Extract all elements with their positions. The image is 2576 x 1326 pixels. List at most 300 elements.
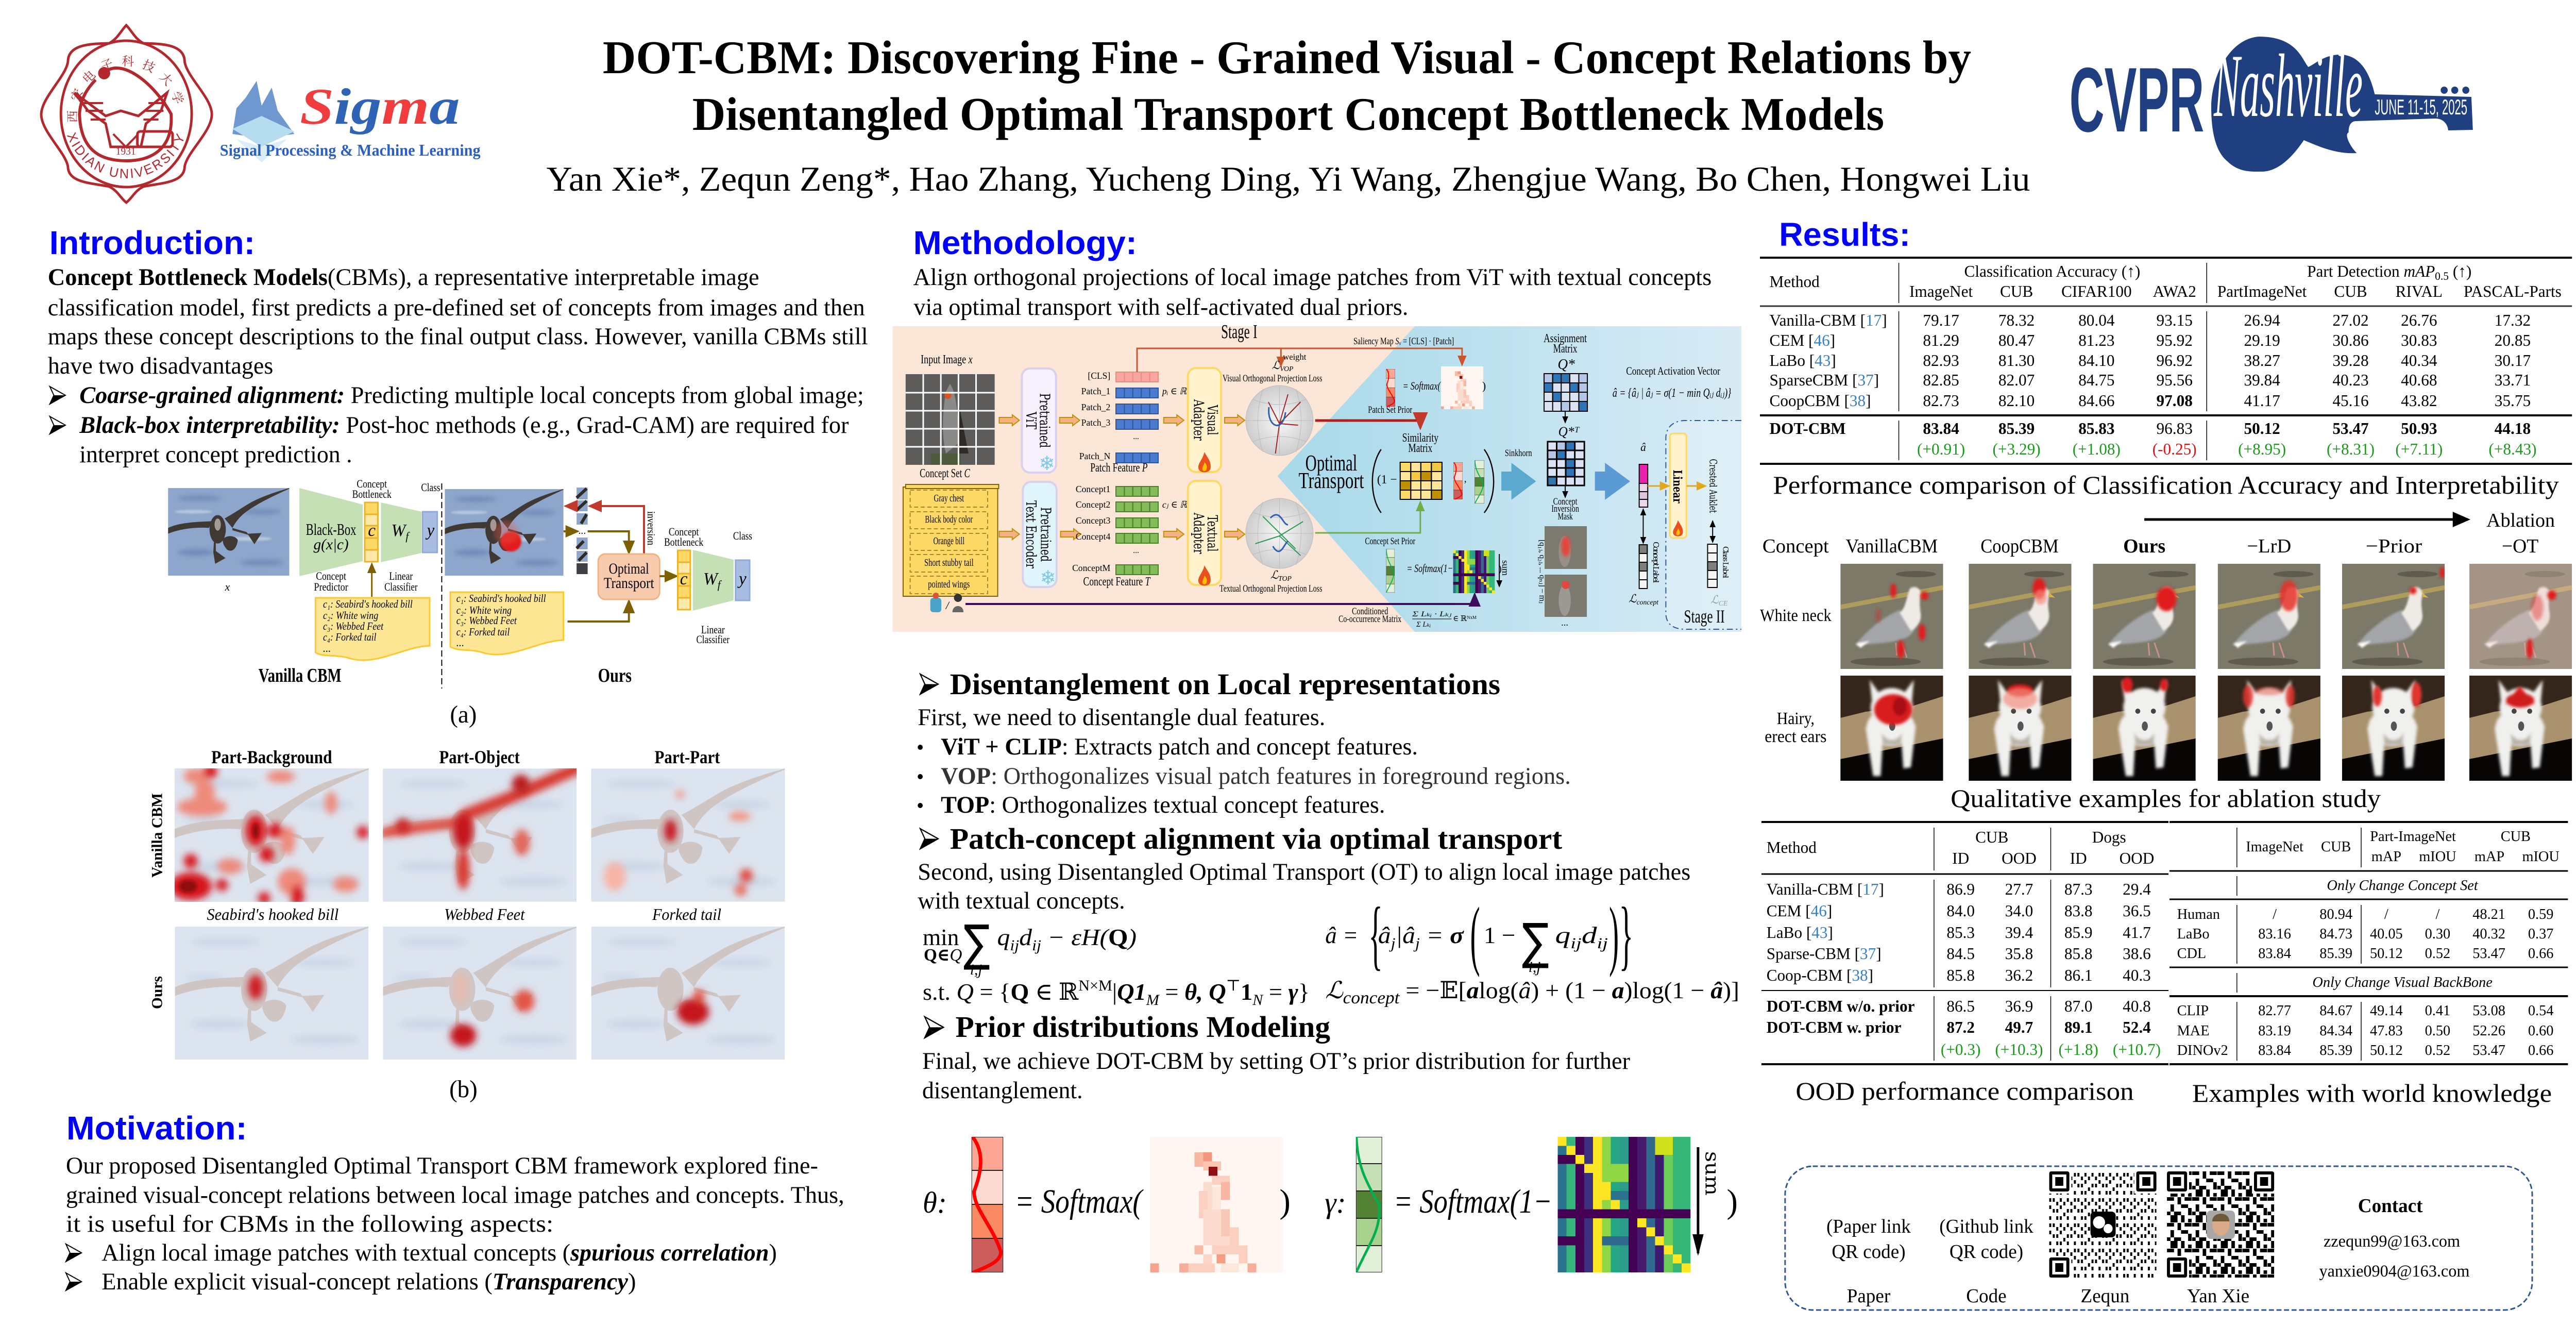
figure (a): vanilla CBM vs ours: c	[368, 521, 376, 540]
diagram small labels: ℒ	[1272, 359, 1280, 372]
heading: Methodology: Methodology:	[913, 225, 1137, 261]
table: classification accuracy and interpretability: 78.32	[1998, 311, 2035, 329]
table: world knowledge examples: 84.67	[2319, 1002, 2352, 1019]
table: classification accuracy and interpretability: 39.84	[2244, 371, 2280, 389]
text block: motivation: Enable explicit visual-concept relations (Transparency)	[101, 1269, 636, 1295]
figure (a): vanilla CBM vs ours: Concept	[316, 570, 346, 582]
table: classification accuracy and interpretability: (↑)	[2449, 262, 2471, 280]
text block: disentanglement	[918, 668, 1571, 818]
dog: CoopCBM	[1969, 676, 2072, 781]
table: world knowledge examples: CDL	[2177, 945, 2206, 962]
diagram small labels: ℒ	[1270, 569, 1278, 581]
concept labels: Seabird's hooked bill	[207, 905, 338, 924]
table: classification accuracy and interpretability: 0.5	[2435, 270, 2449, 282]
equation: activation: j	[1413, 935, 1420, 952]
equation: activation: ∑	[1522, 913, 1549, 970]
table: OOD performance: 52.4	[2123, 1018, 2151, 1036]
table: world knowledge examples: ImageNet	[2246, 838, 2303, 855]
table: classification accuracy and interpretability: 79.17	[1923, 311, 1959, 329]
table: world knowledge examples: 0.66	[2528, 945, 2553, 962]
gull: Prior	[2342, 564, 2445, 669]
contact	[2319, 1196, 2469, 1281]
table: world knowledge examples: mIOU	[2522, 848, 2560, 865]
table: OOD performance: 86.1	[2064, 966, 2093, 984]
figure (a): vanilla CBM vs ours: Concept	[357, 478, 387, 490]
figure (a): vanilla CBM vs ours: Black-Box	[306, 521, 357, 539]
table: classification accuracy and interpretability: 26.76	[2401, 311, 2437, 329]
table: OOD performance: 83.8	[2064, 902, 2093, 920]
concept features	[1072, 484, 1191, 589]
patch features: pᵢ ∈ ℝᵈ	[1161, 386, 1190, 396]
patch features: Patch_N	[1079, 451, 1110, 461]
diagram background	[892, 326, 1741, 632]
table: classification accuracy and interpretability: 30.17	[2495, 351, 2531, 370]
caption labels: Ours	[598, 665, 632, 686]
diagram small labels	[1219, 332, 1732, 629]
patch set prior: = Softmax(	[1403, 380, 1441, 392]
diagram small labels: [q₁ⱼ, q₂ⱼ, ... qₙⱼ] − mⱼ	[1537, 540, 1546, 603]
image patches	[577, 488, 588, 574]
table: world knowledge examples: 0.52	[2425, 945, 2450, 962]
diagram small labels: weight	[1283, 352, 1307, 362]
paper link placeholder: Paper	[1847, 1286, 1891, 1307]
github link placeholder: QR code)	[1950, 1241, 2023, 1263]
equation: optimal transport objective	[923, 915, 1137, 978]
visual adapter	[1188, 368, 1221, 472]
text block: patch-concept alignment	[918, 823, 1690, 914]
gull: OT	[2469, 564, 2572, 669]
table: classification accuracy and interpretability: (+8.95)	[2238, 440, 2286, 458]
concept set prior	[1386, 549, 1511, 593]
equation: activation: =	[1420, 922, 1450, 948]
equation: constraint: M	[1146, 992, 1160, 1009]
table: world knowledge examples: CUB	[2321, 838, 2351, 855]
logo: Xidian University: XIDIAN UNIVERSITY	[67, 132, 183, 178]
optimal transport box: Transport	[604, 575, 654, 592]
table: world knowledge examples: CLIP	[2177, 1002, 2209, 1019]
icons: robot and person	[930, 593, 963, 612]
column headers: −OT	[2502, 536, 2538, 557]
heatmap: webbed feet	[383, 927, 577, 1060]
stage II region	[1666, 421, 1741, 629]
table: world knowledge examples: 53.47	[2472, 1042, 2505, 1059]
equation: optimal transport objective: i,j	[970, 962, 982, 978]
concept features: Concept Feature T	[1083, 575, 1151, 589]
equation: concept loss: concept	[1343, 988, 1400, 1008]
concept inversion mask images	[1545, 526, 1587, 617]
text block: patch-concept alignment: Patch-concept alignment via optimal transport	[950, 823, 1562, 855]
visual adapter: Visual	[1204, 405, 1221, 435]
table: classification accuracy and interpretability: 38.27	[2244, 351, 2280, 370]
equation: optimal transport objective: ∑	[963, 915, 990, 972]
row labels: Ours	[149, 976, 165, 1009]
table: classification accuracy and interpretability: LaBo [43]	[1770, 351, 1836, 370]
equation: activation: (	[1470, 891, 1480, 978]
concept bottleneck and classifier right: y	[737, 569, 747, 589]
linear layer	[1670, 433, 1686, 538]
title	[603, 32, 1971, 140]
table: classification accuracy and interpretability: ImageNet	[1909, 282, 1973, 300]
figure (a): vanilla CBM vs ours: x	[225, 581, 230, 593]
table: classification accuracy and interpretability: 95.56	[2157, 371, 2193, 389]
prior visualization: gamma: γ:	[1325, 1186, 1346, 1219]
table: classification accuracy and interpretability	[1760, 258, 2572, 464]
table: OOD performance: 89.1	[2064, 1018, 2093, 1036]
table: OOD performance: CEM [46]	[1767, 902, 1832, 920]
assignment matrix Q*: Q*	[1557, 356, 1575, 372]
table: classification accuracy and interpretability: 35.75	[2495, 392, 2531, 410]
table: classification accuracy and interpretability: CUB	[2000, 282, 2033, 300]
table: world knowledge examples: 85.39	[2319, 1042, 2352, 1059]
equation: concept loss: = −𝔼[	[1399, 977, 1467, 1003]
table: world knowledge examples: 53.08	[2472, 1002, 2505, 1019]
table: OOD performance: CUB	[1975, 828, 2008, 846]
textual adapter: Textual	[1204, 515, 1221, 552]
paper link placeholder: QR code)	[1832, 1241, 1906, 1263]
text block: motivation: it is useful for CBMs in the following aspects:	[66, 1211, 553, 1237]
arrows between stages	[999, 415, 1245, 540]
logo: Xidian University: 西安电子科技大学	[67, 55, 184, 122]
equation: optimal transport objective: Q∈Q	[924, 946, 962, 965]
input bird image with patch grid	[906, 374, 995, 465]
table: world knowledge examples: LaBo	[2177, 926, 2209, 942]
figure (a): vanilla CBM vs ours: Class	[421, 481, 440, 494]
authors: Yan Xie*, Zequn Zeng*, Hao Zhang, Yucheng Ding, Yi Wang, Zhengjue Wang, Bo Chen, Hongwei Liu	[547, 159, 2030, 198]
github link placeholder: (Github link	[1939, 1216, 2033, 1237]
visual adapter: Adapter	[1190, 399, 1207, 441]
table: world knowledge examples: Part-ImageNet	[2370, 828, 2456, 845]
equation: constraint: =	[1263, 979, 1289, 1005]
QR code: Yan Xie: Yan Xie	[2187, 1286, 2249, 1307]
table: classification accuracy and interpretability: 82.73	[1923, 392, 1959, 410]
text block: motivation	[66, 1153, 844, 1295]
text block: introduction paragraph: maps these concept descriptions to the final output class. However, vanilla CBMs still	[48, 324, 868, 350]
table: OOD performance: ID	[1952, 849, 1969, 867]
logo: CVPR Nashville	[2070, 36, 2473, 172]
table: classification accuracy and interpretability: Classification Accuracy (↑)	[1964, 262, 2140, 280]
table: OOD performance: (+0.3)	[1941, 1040, 1980, 1059]
concept features: Concept3	[1076, 515, 1110, 526]
title: Disentangled Optimal Transport Concept Bottleneck Models	[692, 89, 1884, 140]
table: OOD performance: 49.7	[2005, 1018, 2033, 1036]
table: world knowledge examples	[2170, 822, 2568, 1064]
column headers: CoopCBM	[1980, 536, 2059, 557]
table: classification accuracy and interpretability: 53.47	[2332, 419, 2369, 438]
table: classification accuracy and interpretability: 81.30	[1998, 351, 2035, 370]
table: OOD performance: ID	[2070, 849, 2087, 867]
table: classification accuracy and interpretability: 80.47	[1998, 331, 2035, 349]
equation: activation: {	[1368, 891, 1383, 978]
similarity matrix	[1372, 449, 1494, 513]
text block: methodology intro: via optimal transport with self-activated dual priors.	[913, 294, 1408, 321]
table: classification accuracy and interpretability: PASCAL-Parts	[2464, 282, 2562, 300]
concept labels	[207, 905, 721, 924]
table: OOD performance: 41.7	[2123, 924, 2151, 942]
table: world knowledge examples: 0.37	[2528, 926, 2553, 942]
patch features: ...	[1133, 432, 1139, 441]
table: world knowledge examples: mAP	[2475, 848, 2504, 865]
table: classification accuracy and interpretability: CUB	[2334, 282, 2367, 300]
diagram small labels: ...	[1561, 617, 1568, 628]
equation: constraint: s.t. Q = {Q ∈ ℝ	[923, 979, 1077, 1005]
text block: disentanglement: Disentanglement on Local representations	[950, 668, 1500, 701]
diagram small labels: Textual Orthogonal Projection Loss	[1219, 583, 1322, 594]
caption: world knowledge: Examples with world knowledge	[2192, 1079, 2552, 1107]
logo: CVPR Nashville: JUNE 11-15, 2025	[2375, 95, 2467, 119]
concept features: ConceptM	[1072, 563, 1110, 573]
concept predictor trapezoid	[299, 488, 363, 576]
equation: activation: q	[1555, 922, 1567, 948]
table: classification accuracy and interpretability: 50.93	[2401, 419, 2437, 438]
patch features: [CLS]	[1088, 371, 1110, 381]
table: OOD performance: 40.8	[2123, 997, 2151, 1015]
table: world knowledge examples: 80.94	[2319, 906, 2352, 922]
row labels	[1760, 606, 1832, 746]
table: OOD performance: 85.8	[2064, 945, 2093, 963]
textual adapter: Adapter	[1190, 512, 1207, 555]
table: classification accuracy and interpretability: 41.17	[2244, 392, 2280, 410]
framework diagram: Stage I	[1221, 322, 1257, 343]
paper link placeholder: (Paper link	[1826, 1216, 1911, 1237]
QR code: Zequn: Zequn	[2081, 1286, 2130, 1307]
table: classification accuracy and interpretability: 20.85	[2495, 331, 2531, 349]
panel: links and contact	[1785, 1166, 2532, 1310]
table: classification accuracy and interpretability: CIFAR100	[2061, 282, 2132, 300]
bird image	[168, 488, 290, 576]
equation: optimal transport objective: q	[997, 924, 1009, 950]
row labels: Vanilla CBM	[149, 793, 165, 878]
pretrained ViT: Pretrained	[1037, 393, 1053, 448]
caption labels: Vanilla CBM	[258, 665, 342, 686]
table: world knowledge examples: 49.14	[2370, 1002, 2403, 1019]
diagram small labels: Saliency Map Sᵥ = [CLS] · [Patch]	[1353, 336, 1454, 347]
pretrained text encoder	[1023, 482, 1057, 589]
equation: constraint: ⊤	[1226, 978, 1241, 994]
diagram small labels: Matrix	[1553, 342, 1578, 356]
dog: VanillaCBM	[1840, 676, 1943, 781]
table: world knowledge examples: 52.26	[2472, 1022, 2505, 1039]
text block: patch-concept alignment: with textual concepts.	[918, 888, 1125, 914]
diagram small labels: CE	[1719, 599, 1728, 607]
table: world knowledge examples: 0.30	[2425, 926, 2450, 942]
pretrained ViT: ❄	[1039, 452, 1055, 475]
equation: activation: )	[1609, 891, 1619, 978]
table: classification accuracy and interpretability: SparseCBM [37]	[1770, 371, 1879, 389]
table: world knowledge examples: /	[2273, 906, 2277, 922]
row labels: White neck	[1760, 606, 1832, 625]
table: world knowledge examples: 83.19	[2258, 1022, 2291, 1039]
equation: activation: ij	[1570, 935, 1582, 952]
column headers: −LrD	[2247, 536, 2291, 557]
github link placeholder	[1939, 1216, 2033, 1307]
heatmap: seabird's hooked bill	[175, 927, 369, 1060]
diagram small labels: Inversion	[1551, 503, 1579, 514]
table: world knowledge examples: MAE	[2177, 1022, 2210, 1039]
dog: OT	[2469, 676, 2572, 781]
concept list document left: c₂: White wing	[323, 610, 378, 622]
table: classification accuracy and interpretability: CoopCBM [38]	[1770, 392, 1871, 410]
diagram small labels: Conditioned	[1352, 606, 1388, 617]
table: OOD performance: 84.5	[1946, 945, 1975, 963]
dog: Ours	[2093, 676, 2196, 781]
similarity matrix: ,	[1464, 473, 1467, 484]
table: world knowledge examples: Only Change Concept Set	[2327, 877, 2479, 894]
transposed matrix Q*T: Q*ᵀ	[1558, 424, 1580, 439]
diagram small labels: Sinkhorn	[1505, 448, 1532, 459]
concept list document right: c₄: Forked tail	[456, 627, 510, 638]
linear layer: Linear	[1670, 470, 1685, 503]
column headers: VanillaCBM	[1846, 536, 1938, 557]
concept set prior: = Softmax(1−	[1406, 562, 1453, 575]
text block: prior distributions: Prior distributions Modeling	[955, 1011, 1330, 1044]
figure (a): vanilla CBM vs ours: inversion	[645, 511, 657, 545]
table: classification accuracy and interpretability: Method	[1770, 273, 1820, 291]
dog: Prior	[2342, 676, 2445, 781]
saliency connectors	[1137, 348, 1462, 372]
concept scroll: Gray chest	[934, 493, 964, 504]
table: classification accuracy and interpretability: (+7.11)	[2395, 440, 2443, 458]
figure (b): heatmap comparison: (b)	[449, 1076, 478, 1103]
text block: introduction paragraph: Concept Bottleneck Models(CBMs), a representative interpretable image	[48, 264, 759, 291]
text block: disentanglement: First, we need to disentangle dual features.	[918, 704, 1325, 731]
framework diagram	[892, 322, 1741, 632]
concept list document right: c₃: Webbed Feet	[456, 615, 517, 627]
pretrained ViT: ViT	[1023, 411, 1040, 429]
diagram small labels: Concept Set Prior	[1365, 536, 1416, 547]
text block: introduction paragraph: have two disadvantages	[48, 353, 273, 379]
table: OOD performance: DOT-CBM w. prior	[1767, 1018, 1901, 1036]
sphere: textual projection	[1246, 498, 1313, 568]
figure (a): vanilla CBM vs ours: Predictor	[314, 581, 348, 593]
table: OOD performance: 84.0	[1946, 902, 1975, 920]
github link placeholder: Code	[1966, 1286, 2007, 1307]
optimal transport box	[598, 554, 659, 599]
table: classification accuracy and interpretability: 40.68	[2401, 371, 2437, 389]
table: OOD performance: 34.0	[2005, 902, 2033, 920]
equation: constraint: Q1	[1117, 979, 1146, 1005]
table: world knowledge examples: Human	[2177, 906, 2220, 922]
caption: performance comparison: Performance comparison of Classification Accuracy and Interpretability	[1773, 471, 2559, 499]
concept scroll: Black body color	[925, 514, 973, 525]
table: classification accuracy and interpretability: 82.10	[1998, 392, 2035, 410]
gull: LrD	[2218, 564, 2320, 669]
table: classification accuracy and interpretability: 93.15	[2157, 311, 2193, 329]
table: OOD performance: 87.0	[2064, 997, 2093, 1015]
table: world knowledge examples: 0.60	[2528, 1022, 2553, 1039]
table: classification accuracy and interpretability: 43.82	[2401, 392, 2437, 410]
table: classification accuracy and interpretability: 96.83	[2157, 419, 2193, 438]
table: OOD performance: (+10.7)	[2113, 1040, 2161, 1059]
table: classification accuracy and interpretability: (+3.29)	[1993, 440, 2041, 458]
table: OOD performance: 36.2	[2005, 966, 2033, 984]
table: OOD performance: 40.3	[2123, 966, 2151, 984]
concept list document left: c₄: Forked tail	[323, 632, 377, 643]
row labels	[149, 793, 165, 1009]
logo: Sigma lab: Sigma	[300, 78, 460, 135]
table: world knowledge examples: mAP	[2371, 848, 2401, 865]
text block: methodology intro: Align orthogonal projections of local image patches from ViT with textual concepts	[913, 264, 1711, 291]
table: classification accuracy and interpretability: 81.23	[2078, 331, 2114, 349]
table: classification accuracy and interpretability: 50.12	[2244, 419, 2280, 438]
equation: activation	[1325, 891, 1633, 978]
optimal transport label	[1299, 451, 1364, 493]
figure (a): vanilla CBM vs ours: g(x|c)	[313, 536, 349, 553]
icons: robot and person: /	[945, 599, 950, 612]
concept and class labels	[1639, 509, 1730, 589]
patch features: Patch_2	[1081, 402, 1110, 412]
logo: Xidian University: 1931	[116, 146, 136, 157]
diagram small labels: Σ Lₖᵢ · Lₖⱼ	[1412, 610, 1451, 618]
prior visualization: theta: θ:	[923, 1186, 947, 1219]
table: world knowledge examples: 83.84	[2258, 945, 2291, 962]
text block: disentanglement: ViT + CLIP: Extracts patch and concept features.	[941, 734, 1418, 760]
text block: motivation: grained visual-concept relations between local image patches and concepts. Thus,	[66, 1182, 844, 1208]
equation: optimal transport objective: Q)	[1108, 924, 1136, 950]
text block: prior distributions	[922, 1011, 1631, 1104]
equation: constraint: N	[1252, 992, 1264, 1009]
diagram small labels: VOP	[1280, 365, 1294, 373]
equation: optimal transport objective: − εH(	[1041, 924, 1110, 950]
table: classification accuracy and interpretability: RIVAL	[2396, 282, 2443, 300]
table: classification accuracy and interpretability: CEM [46]	[1770, 331, 1835, 349]
table: classification accuracy and interpretability: 17.32	[2495, 311, 2531, 329]
table: world knowledge examples: DINOv2	[2177, 1042, 2228, 1059]
heading: Motivation: Motivation:	[66, 1110, 247, 1147]
table: OOD performance: 87.3	[2064, 880, 2093, 898]
bird image with heat spot	[445, 489, 564, 576]
row labels: Hairy,	[1777, 709, 1815, 728]
heatmap: part-object	[383, 768, 577, 902]
concept features: Concept4	[1076, 531, 1110, 542]
table: OOD performance: Method	[1767, 838, 1817, 857]
concept bottleneck and classifier right: Bottleneck	[664, 536, 703, 548]
equation: optimal transport objective: ij	[1010, 937, 1019, 954]
table: OOD performance: 36.5	[2123, 902, 2151, 920]
diagram small labels: Patch Set Prior	[1368, 405, 1413, 415]
text block: prior distributions: disentanglement.	[922, 1078, 1083, 1104]
gull: VanillaCBM	[1840, 564, 1943, 669]
concept bottleneck and classifier right: Linear	[701, 624, 725, 636]
caption: ablation: Qualitative examples for ablation study	[1951, 784, 2381, 813]
patch features	[1079, 371, 1190, 475]
concept and class labels: Class Label	[1721, 546, 1730, 579]
table: OOD performance: LaBo [43]	[1767, 924, 1833, 942]
equation: activation: ij	[1597, 935, 1608, 952]
table: OOD performance: OOD	[2120, 849, 2154, 867]
table: classification accuracy and interpretability: 29.19	[2244, 331, 2280, 349]
table: classification accuracy and interpretability: AWA2	[2153, 282, 2196, 300]
framework diagram: Concept Set C	[920, 467, 971, 480]
text block: introduction paragraph	[48, 264, 868, 468]
table: classification accuracy and interpretability: 85.83	[2078, 419, 2114, 438]
heading: Introduction: Introduction:	[49, 225, 255, 261]
concept and class labels: Concept Label	[1651, 542, 1660, 583]
optimal transport label: Optimal	[1306, 451, 1357, 476]
equation: activation: â =	[1325, 922, 1358, 948]
equation: constraint: =	[1159, 979, 1184, 1005]
table: classification accuracy and interpretability: (+8.31)	[2327, 440, 2375, 458]
figure (a): vanilla CBM vs ours: ...	[579, 525, 586, 536]
column headers: Ours	[2123, 536, 2165, 557]
sinkhorn big arrows	[1501, 463, 1630, 500]
table: classification accuracy and interpretability: 39.28	[2332, 351, 2369, 370]
equation: optimal transport objective: d	[1019, 924, 1032, 950]
optimal transport label: Transport	[1299, 468, 1364, 493]
equation: activation: j	[1388, 935, 1396, 952]
table: OOD performance: Sparse-CBM [37]	[1767, 945, 1882, 963]
concept features: Concept1	[1076, 484, 1110, 494]
diagram small labels: ℒ	[1629, 593, 1637, 605]
